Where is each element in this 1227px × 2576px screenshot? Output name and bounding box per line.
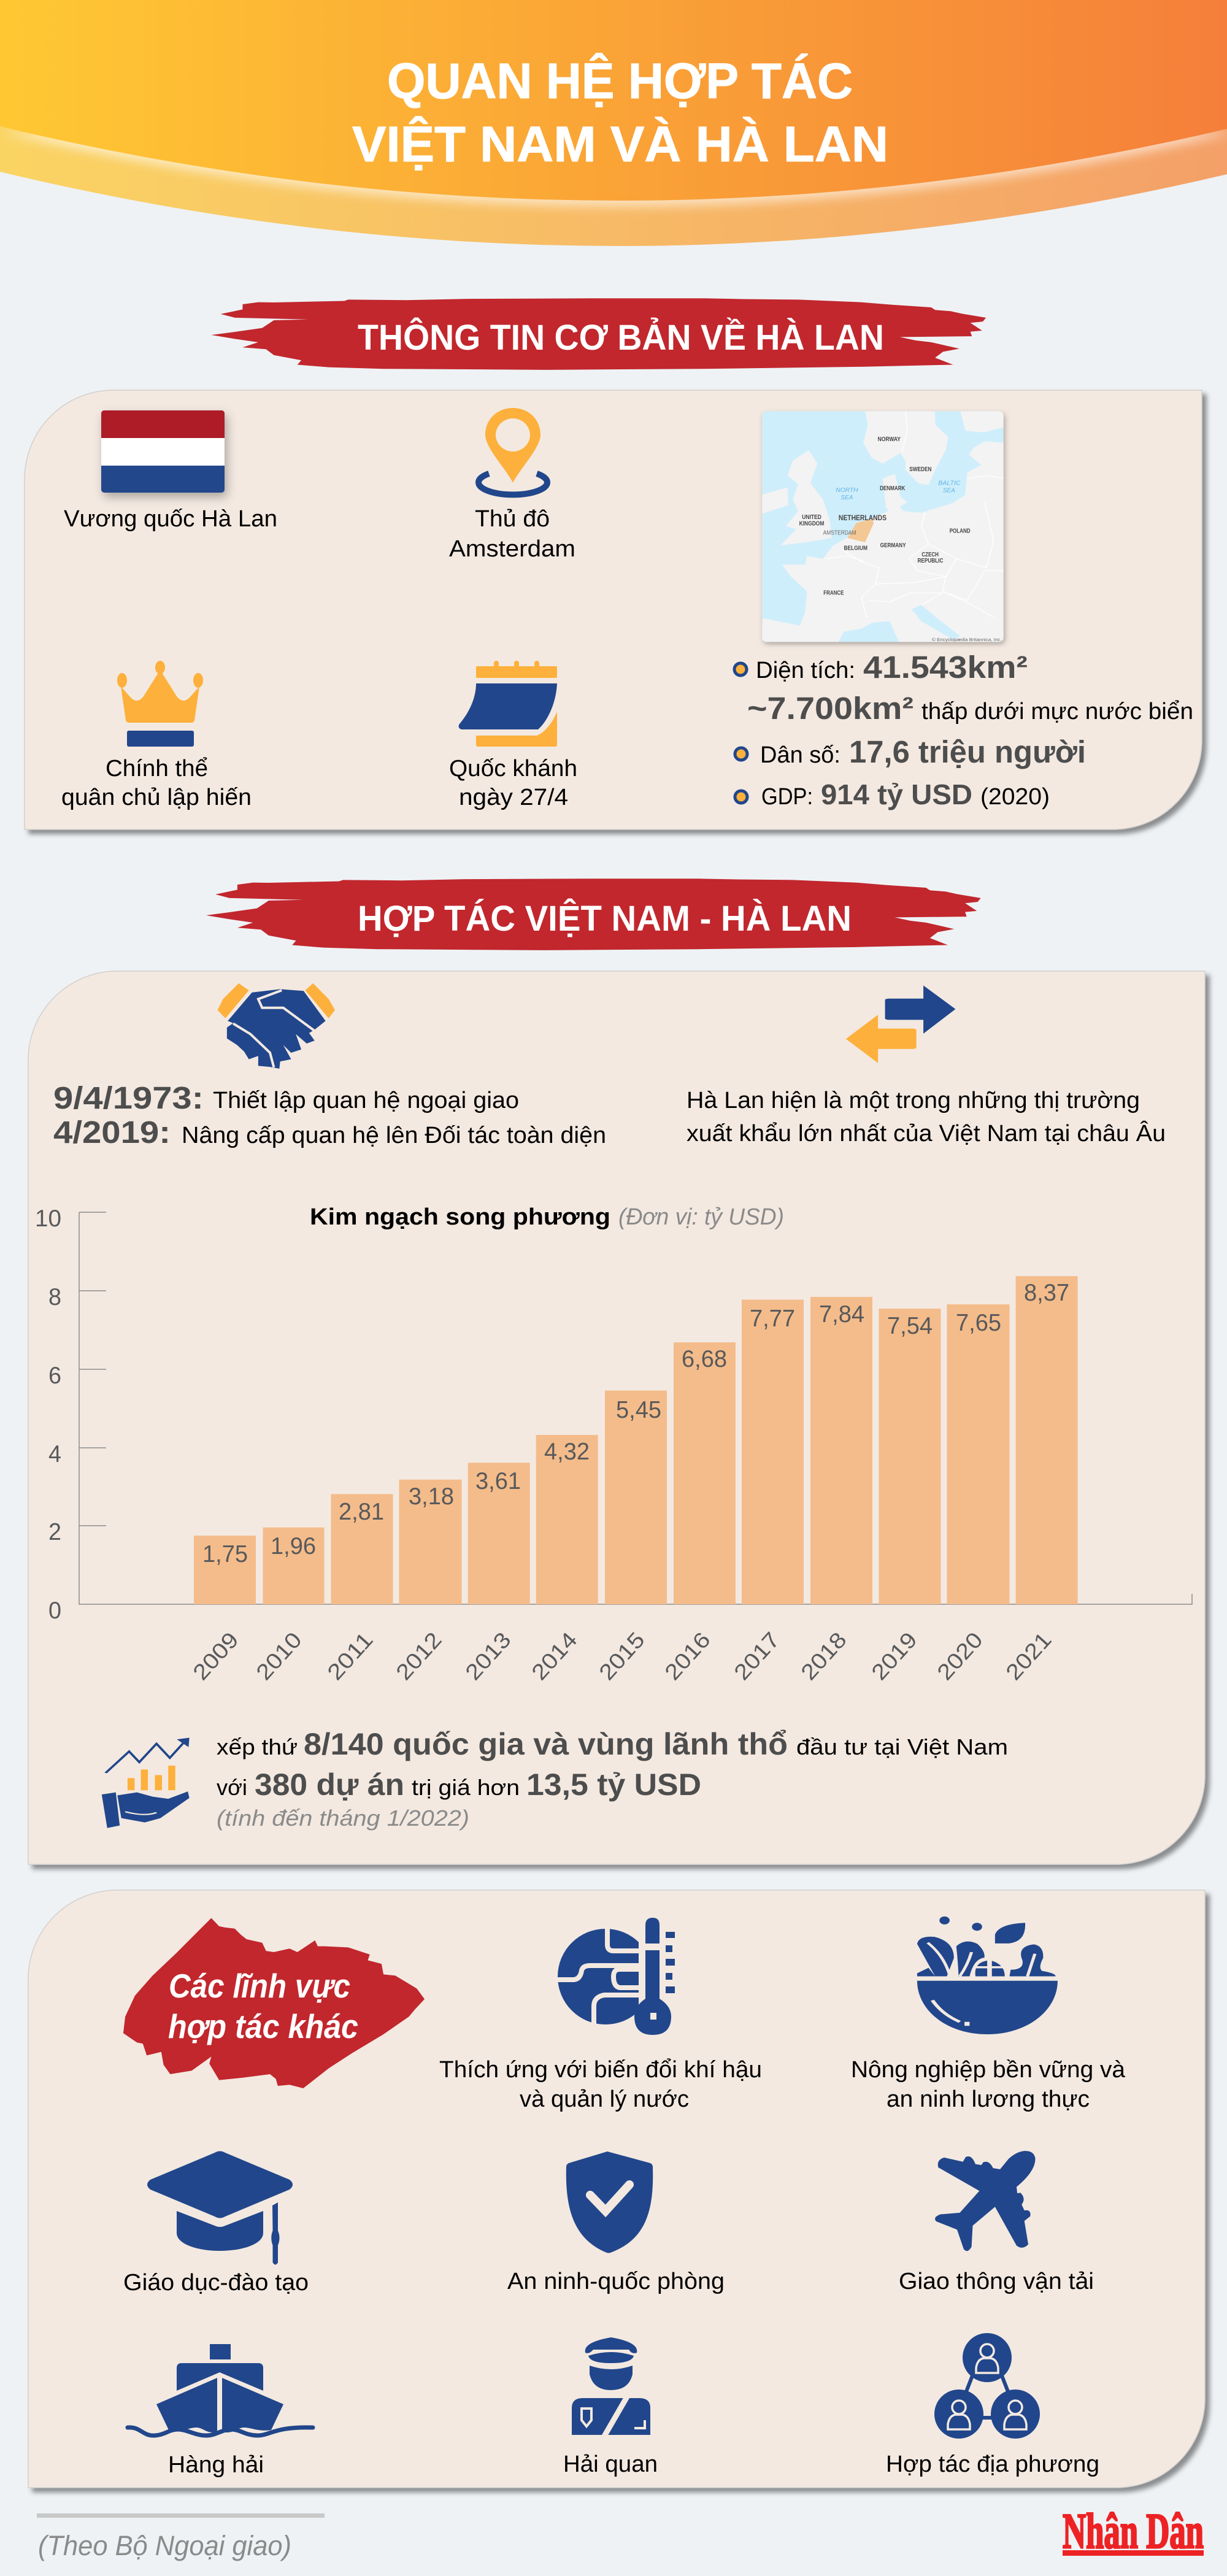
map of Netherlands in Europe	[761, 410, 1006, 645]
map of Netherlands in Europe: UNITED	[802, 514, 821, 521]
text: milestones: 9/4/1973:	[53, 1080, 204, 1115]
bar values: 4,32	[544, 1439, 590, 1465]
label: transport: Giao thông vận tải	[899, 2269, 1094, 2294]
bar values: 3,18	[409, 1483, 454, 1510]
facts: area, population, GDP	[734, 650, 1193, 810]
label: customs: Hải quan	[563, 2451, 658, 2477]
source note: (Theo Bộ Ngoại giao)	[38, 2530, 291, 2561]
facts: area, population, GDP: GDP:	[761, 784, 813, 810]
x axis years: 2011	[322, 1627, 378, 1685]
map of Netherlands in Europe: CZECH	[921, 552, 939, 558]
icon: shield	[566, 2151, 653, 2253]
label: government: Chính thể	[106, 756, 208, 782]
x axis years: 2014	[526, 1627, 582, 1685]
x axis years: 2019	[866, 1627, 922, 1685]
label: capital: Thủ đô	[475, 506, 550, 532]
x axis years: 2010	[251, 1627, 307, 1685]
label: security: An ninh-quốc phòng	[507, 2269, 725, 2294]
icon: investment growth	[102, 1737, 190, 1828]
label: capital: Amsterdam	[449, 536, 575, 562]
text: milestones: 4/2019:	[53, 1115, 171, 1150]
label: local cooperation: Hợp tác địa phương	[886, 2451, 1099, 2477]
icon: map pin	[479, 408, 547, 494]
bar values: 7,54	[887, 1313, 933, 1339]
label: education: Giáo dục-đào tạo	[123, 2270, 309, 2296]
map of Netherlands in Europe: AMSTERDAM	[823, 529, 856, 536]
chart title: (Đơn vị: tỷ USD)	[618, 1204, 784, 1230]
map of Netherlands in Europe: NORTH	[836, 487, 858, 493]
heading: cooperation	[206, 879, 981, 950]
heading: cooperation: HỢP TÁC VIỆT NAM - HÀ LAN	[358, 899, 852, 939]
text: investment ranking: 8/140 quốc gia và vùng lãnh thổ	[304, 1727, 788, 1761]
bar values: 7,77	[750, 1305, 795, 1332]
icon: graduation cap	[147, 2151, 293, 2265]
x axis years: 2009	[188, 1627, 244, 1685]
y axis labels: 0	[48, 1598, 61, 1624]
map of Netherlands in Europe: REPUBLIC	[917, 558, 943, 564]
title	[352, 53, 888, 172]
y axis labels	[35, 1205, 61, 1624]
icon: calendar	[459, 661, 557, 747]
bar values: 1,96	[271, 1533, 316, 1559]
map of Netherlands in Europe: SEA	[943, 488, 955, 494]
label: capital	[449, 506, 575, 562]
label: climate	[439, 2057, 762, 2112]
bar values: 2,81	[339, 1499, 384, 1525]
panel: basic information	[25, 390, 1202, 829]
x axis years: 2020	[932, 1627, 988, 1685]
y axis labels: 6	[48, 1363, 61, 1389]
label: agriculture: an ninh lương thực	[887, 2086, 1090, 2112]
callout: other fields of cooperation: Các lĩnh vực	[169, 1967, 350, 2005]
x axis years: 2016	[660, 1627, 715, 1685]
map of Netherlands in Europe: KINGDOM	[799, 520, 824, 527]
text: export market: xuất khẩu lớn nhất của Việt Nam tại châu Âu	[687, 1120, 1166, 1147]
text: milestones: Thiết lập quan hệ ngoại giao	[213, 1088, 519, 1113]
label: agriculture	[851, 2057, 1126, 2112]
map of Netherlands in Europe: POLAND	[950, 528, 971, 534]
icon: ship	[128, 2344, 313, 2436]
x axis years	[188, 1627, 1056, 1685]
icon: Netherlands flag	[101, 410, 225, 493]
x axis years: 2013	[460, 1627, 516, 1685]
map of Netherlands in Europe: NORWAY	[878, 436, 901, 443]
label: climate: Thích ứng với biến đổi khí hậu	[439, 2057, 762, 2083]
x axis years: 2021	[1001, 1627, 1056, 1685]
facts: area, population, GDP: (2020)	[980, 784, 1050, 810]
bullet: area	[734, 663, 747, 675]
label: national day: ngày 27/4	[459, 785, 568, 810]
map of Netherlands in Europe: SWEDEN	[909, 466, 931, 473]
text: investment ranking: đầu tư tại Việt Nam	[796, 1734, 1008, 1759]
label: agriculture: Nông nghiệp bền vững và	[851, 2057, 1126, 2083]
icon: airplane	[935, 2151, 1036, 2251]
title: QUAN HỆ HỢP TÁC	[387, 53, 853, 109]
x axis years: 2018	[796, 1627, 852, 1685]
label: government: quân chủ lập hiến	[61, 785, 252, 810]
heading: basic information	[211, 298, 986, 370]
text: investment ranking: 13,5 tỷ USD	[526, 1767, 701, 1802]
x axis years: 2015	[594, 1627, 650, 1685]
facts: area, population, GDP: 914 tỷ USD	[821, 779, 972, 810]
y axis labels: 10	[35, 1205, 61, 1232]
text: investment ranking: 380 dự án	[255, 1767, 404, 1802]
map of Netherlands in Europe: BELGIUM	[844, 545, 867, 552]
callout: other fields of cooperation	[123, 1918, 425, 2088]
bar values: 3,61	[475, 1468, 521, 1494]
text: investment ranking: với	[217, 1775, 247, 1800]
icon: customs officer	[572, 2337, 650, 2436]
bar values: 5,45	[616, 1397, 661, 1423]
panel: other fields	[28, 1890, 1205, 2488]
facts: area, population, GDP: Diện tích:	[756, 658, 855, 683]
label: national day: Quốc khánh	[449, 756, 577, 782]
facts: area, population, GDP: thấp dưới mực nước biển	[921, 699, 1193, 725]
facts: area, population, GDP: 17,6 triệu người	[849, 734, 1086, 769]
icon: salad bowl	[917, 1917, 1058, 2034]
callout: other fields of cooperation: hợp tác khác	[168, 2007, 358, 2045]
map of Netherlands in Europe: FRANCE	[823, 590, 844, 596]
bar values: 7,65	[956, 1310, 1001, 1336]
bar values: 7,84	[819, 1301, 864, 1328]
icon: handshake	[218, 983, 335, 1069]
map of Netherlands in Europe: DENMARK	[880, 485, 905, 492]
icon: exchange arrows	[846, 985, 955, 1063]
bar values: 8,37	[1024, 1280, 1069, 1306]
facts: area, population, GDP: 41.543km²	[863, 650, 1028, 685]
text: milestones: Nâng cấp quan hệ lên Đối tác toàn diện	[182, 1123, 606, 1148]
map of Netherlands in Europe: GERMANY	[880, 542, 906, 549]
bars	[194, 1276, 1078, 1604]
chart title	[310, 1204, 784, 1230]
map of Netherlands in Europe: SEA	[840, 494, 853, 501]
label: maritime: Hàng hải	[168, 2452, 264, 2478]
label: government	[61, 756, 252, 810]
y axis labels: 4	[48, 1441, 61, 1467]
source rule	[37, 2513, 325, 2518]
bar values: 6,68	[682, 1346, 727, 1372]
label: national day	[449, 756, 577, 810]
bar values: 1,75	[202, 1541, 248, 1567]
chart title: Kim ngạch song phương	[310, 1204, 610, 1230]
bar chart: bilateral trade	[35, 1204, 1192, 1685]
text: investment ranking: xếp thứ	[217, 1734, 298, 1759]
text: milestones	[53, 1080, 606, 1150]
label: climate: và quản lý nước	[520, 2086, 689, 2112]
text: investment ranking: trị giá hơn	[412, 1775, 520, 1800]
y axis labels: 8	[48, 1284, 61, 1310]
map of Netherlands in Europe: NETHERLANDS	[839, 513, 887, 522]
text: export market: Hà Lan hiện là một trong những thị trường	[687, 1088, 1140, 1113]
map of Netherlands in Europe: © Encyclopædia Britannica, Inc.	[932, 637, 1002, 642]
icon: climate and water	[555, 1918, 675, 2035]
x axis years: 2012	[391, 1627, 447, 1685]
panel: cooperation	[28, 971, 1205, 1864]
label: kingdom: Vương quốc Hà Lan	[64, 506, 277, 532]
text: investment ranking	[217, 1727, 1008, 1831]
facts: area, population, GDP: ~7.700km²	[747, 691, 914, 726]
y axis labels: 2	[48, 1519, 61, 1545]
bar values	[202, 1280, 1069, 1567]
map of Netherlands in Europe: BALTIC	[938, 480, 961, 486]
text: investment ranking: (tính đến tháng 1/2022)	[217, 1805, 469, 1831]
x axis years: 2017	[729, 1627, 785, 1685]
title: VIỆT NAM VÀ HÀ LAN	[352, 117, 888, 172]
icon: connected people	[934, 2333, 1040, 2439]
text: export market	[687, 1088, 1166, 1147]
header banner	[0, 0, 1227, 246]
icon: crown	[117, 661, 203, 747]
heading: basic information: THÔNG TIN CƠ BẢN VỀ HÀ LAN	[358, 318, 884, 358]
facts: area, population, GDP: Dân số:	[760, 742, 840, 768]
